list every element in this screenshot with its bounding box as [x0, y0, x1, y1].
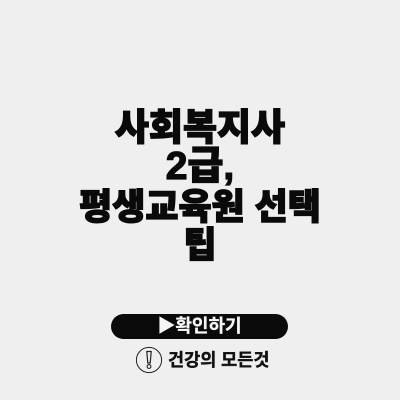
title: 2급,: [166, 145, 234, 188]
brand text: 건강의 모든것: [168, 350, 269, 370]
title: 평생교육원 선택: [79, 186, 321, 227]
button: 확인하기: [111, 314, 288, 339]
title: [79, 107, 321, 265]
title: 팁: [183, 224, 217, 265]
title: 사회복지사: [115, 107, 285, 148]
icon: exclamation in circle: [136, 346, 162, 374]
button: 확인하기: ▶확인하기: [157, 316, 242, 336]
